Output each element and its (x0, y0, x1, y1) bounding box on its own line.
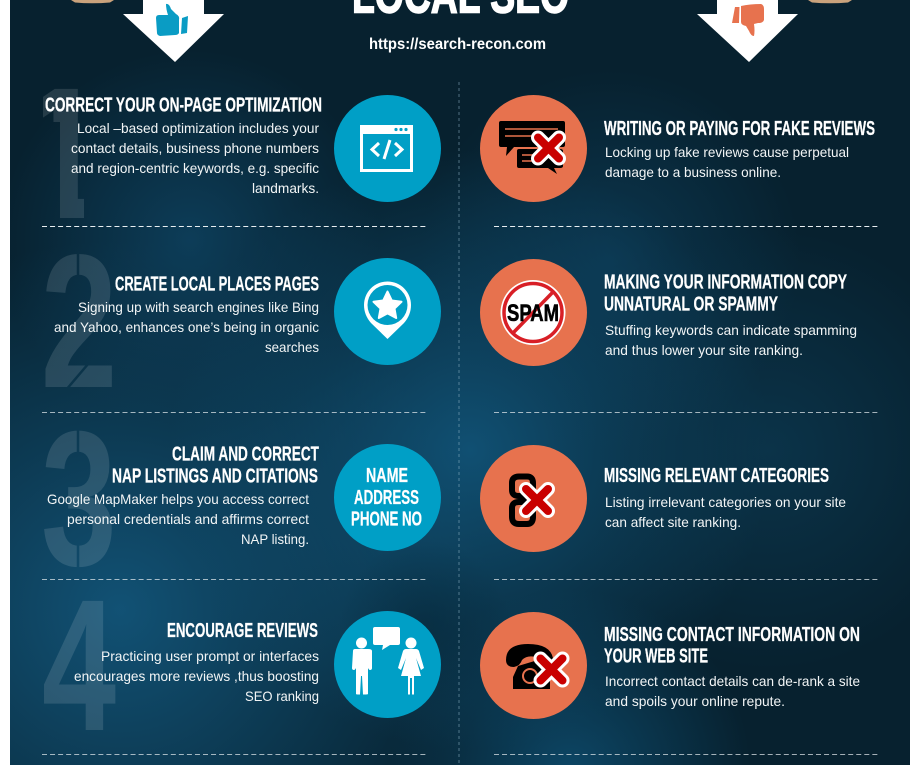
body text (605, 322, 857, 358)
panel: left item 1 (45, 94, 441, 202)
icon: name address phone: NAME (366, 464, 408, 487)
body text: contact details, business phone numbers (71, 140, 319, 156)
big number 2: 2 (41, 215, 117, 428)
panel: left item 4 (74, 611, 441, 718)
scale base left (71, 0, 114, 3)
body text: and spoils your online repute. (605, 693, 785, 709)
body text: Incorrect contact details can de-rank a site (605, 673, 860, 689)
panel: right item 3 (480, 445, 846, 552)
body text: and region-centric keywords, e.g. specific (71, 160, 319, 176)
body text: Locking up fake reviews cause perpetual (605, 144, 849, 160)
icon: people talking (334, 611, 441, 718)
heading: CREATE LOCAL PLACES PAGES (115, 272, 319, 296)
arrow: do (thumbs up) (123, 0, 224, 62)
icon: no spam: SPAM (507, 300, 559, 327)
body text (74, 648, 319, 704)
heading: UNNATURAL OR SPAMMY (604, 292, 778, 315)
body text: NAP listing. (241, 531, 309, 547)
vertical divider (458, 82, 460, 765)
body text (605, 673, 860, 709)
body text (605, 494, 846, 530)
arrow: don't (thumbs down) (697, 0, 798, 62)
heading: CLAIM AND CORRECT (172, 442, 319, 466)
heading: ENCOURAGE REVIEWS (167, 619, 318, 642)
body text (47, 491, 309, 547)
panel: right item 1 (480, 95, 875, 202)
panel: right item 2 (480, 259, 857, 366)
icon: code window (334, 95, 441, 202)
big number 3: 3 (41, 392, 117, 607)
heading (604, 623, 860, 667)
website url: https://search-recon.com (369, 36, 546, 53)
body text (71, 120, 319, 196)
icon: no spam (480, 259, 587, 366)
body text: can affect site ranking. (605, 514, 741, 530)
heading (604, 270, 847, 315)
body text: Practicing user prompt or interfaces (101, 648, 319, 664)
big number 1: 1 (12, 48, 111, 258)
heading: CORRECT YOUR ON-PAGE OPTIMIZATION (45, 94, 322, 116)
body text: damage to a business online. (605, 164, 781, 180)
body text: SEO ranking (245, 688, 319, 704)
body text: landmarks. (252, 180, 319, 196)
icon: name address phone: ADDRESS (354, 486, 419, 509)
icon: broken link (480, 445, 587, 552)
heading: NAP LISTINGS AND CITATIONS (112, 464, 318, 488)
body text: encourages more reviews ,thus boosting (74, 668, 319, 684)
icon: location star pin (334, 258, 441, 365)
body text: personal credentials and affirms correct (67, 511, 309, 527)
icon: fake reviews (480, 95, 587, 202)
body text (54, 299, 319, 355)
panel: left item 3 (47, 442, 441, 551)
icon: telephone (480, 612, 587, 719)
body text: Stuffing keywords can indicate spamming (605, 322, 857, 338)
panel: right item 4 (480, 612, 860, 719)
big number 4: 4 (42, 562, 116, 765)
body text: searches (265, 339, 319, 355)
body text: Signing up with search engines like Bing (78, 299, 319, 315)
panel: left item 2 (54, 258, 441, 365)
body text: and thus lower your site ranking. (605, 342, 803, 358)
body text: Google MapMaker helps you access correct (47, 491, 309, 507)
body text (605, 144, 849, 180)
body text: Listing irrelevant categories on your site (605, 494, 846, 510)
body text: and Yahoo, enhances one’s being in organic (54, 319, 319, 335)
icon: name address phone (334, 444, 441, 551)
scale base right (808, 0, 852, 3)
heading: YOUR WEB SITE (604, 644, 708, 667)
body text: Local –based optimization includes your (77, 120, 319, 136)
icon: name address phone: PHONE NO (351, 508, 422, 530)
row dividers (42, 226, 878, 754)
heading (112, 442, 319, 488)
